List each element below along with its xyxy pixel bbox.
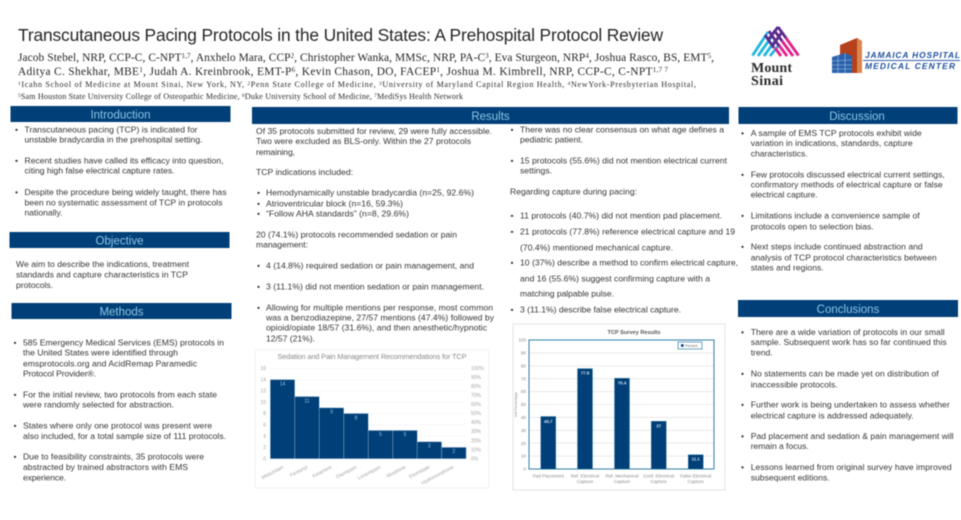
legend (678, 342, 702, 349)
text column: results right: There was no clear consensus on what age defines a (520, 125, 724, 135)
chart: sedation and pain management: 80% (471, 384, 482, 390)
authors: , Eva Sturgeon, NRP (489, 52, 585, 64)
heading: methods (12, 303, 232, 319)
chart: sedation and pain management: 20% (471, 438, 482, 444)
bullet text: introduction: Despite the procedure being widely taught, there has (24, 187, 226, 197)
text column: results left: Hemodynamically unstable bradycardia (n=25, 92.6%) (266, 188, 474, 198)
text column: results left: • (257, 199, 260, 209)
chart: sedation and pain management: 12 (260, 389, 266, 395)
bullet text: conclusions: • (741, 327, 744, 337)
bullet text: introduction: unstable bradycardia in the prehospital setting. (24, 135, 202, 145)
chart: sedation and pain management: Midazolam (261, 464, 285, 481)
bullet text: conclusions: Lessons learned from original survey have improved (751, 462, 952, 472)
text column: results left: 20 (74.1%) protocols recommended sedation or pain (256, 230, 457, 240)
text column: results right (510, 125, 738, 314)
chart: sedation and pain management: 2 (263, 445, 266, 451)
chart: sedation and pain management: 50% (471, 411, 482, 417)
chart: sedation and pain management: 70% (471, 393, 482, 399)
authors: 1 (436, 66, 440, 74)
bullet text: conclusions: trend. (751, 347, 773, 357)
chart: TCP survey results: Conf. Electrical (643, 474, 674, 478)
bullet text: methods: abstracted by trained abstractors with EMS (23, 462, 188, 472)
bullet text: conclusions: • (741, 399, 744, 409)
bullet text: methods: • (14, 420, 17, 430)
authors: , Kevin Chason, DO, FACEP (295, 66, 436, 78)
text: objective: protocols. (16, 280, 53, 290)
chart: sedation and pain management: 6 (263, 422, 266, 428)
bullet text: introduction: been no systematic assessment of TCP in protocols (24, 197, 222, 207)
affiliations: MediSys Health Network (377, 92, 464, 101)
chart: sedation and pain management: 8 (263, 411, 266, 417)
bullet text: introduction: citing high false electrical capture rates. (24, 166, 174, 176)
bullet text: introduction: Recent studies have called its efficacy into question, (24, 156, 224, 166)
bullet text: methods: 585 Emergency Medical Services (EMS) protocols in (23, 337, 224, 347)
text column: results right: Regarding capture during pacing: (510, 187, 637, 197)
text column: results left: Allowing for multiple mentions per response, most common (266, 303, 493, 313)
text column: results right: and 16 (55.6%) suggest confirming capture with a (520, 274, 710, 284)
text column: results right: • (510, 156, 514, 166)
authors: 1 (139, 66, 143, 74)
heading: introduction (10, 106, 230, 122)
chart: TCP survey results: 50 (521, 402, 526, 407)
affiliations: Duke University School of Medicine, (245, 92, 374, 101)
text column: results left: was a benzodiazepine, 27/57 mentions (47.4%) followed by (265, 313, 495, 323)
affiliations: 3 (379, 81, 382, 87)
chart: sedation and pain management: 2 (452, 449, 455, 455)
bullet text: conclusions: sample. Subsequent work has so far continued this (751, 337, 947, 347)
heading: objective (10, 232, 230, 248)
chart: TCP survey results: 20 (521, 441, 526, 446)
authors: , Anxhelo Mara, CCP (191, 52, 291, 64)
authors: , (711, 52, 714, 64)
chart: TCP survey results: Capture (688, 479, 704, 484)
text column: results right: 11 protocols (40.7%) did not mention pad placement. (520, 210, 722, 220)
bullet text: methods: also included, for a total sample size of 111 protocols. (23, 431, 226, 441)
chart: sedation and pain management: 40% (471, 420, 482, 426)
authors: 5 (708, 52, 712, 60)
chart: sedation and pain management: Hydromorphone (420, 464, 455, 487)
text column: results left: • (257, 209, 260, 219)
bullet text: discussion: characteristics. (751, 149, 808, 159)
chart: TCP survey results: 80 (521, 363, 526, 368)
authors: Jacob Stebel, NRP, CCP-C, C-NPT (18, 52, 182, 64)
chart: sedation and pain management: Diazepam (335, 464, 358, 480)
text column: results left: Of 35 protocols submitted for review, 29 were fully accessible. (256, 126, 492, 136)
text column: results left: “Follow AHA standards” (n=8, 29.6%) (266, 209, 409, 219)
chart: TCP survey results: 10 (521, 454, 526, 459)
affiliations (18, 80, 696, 101)
bullet text: introduction: • (15, 187, 18, 197)
chart: sedation and pain management: Etomidate (408, 464, 431, 480)
chart: sedation and pain management: 14 (280, 382, 285, 388)
text column: results left: • (257, 281, 260, 291)
chart: sedation and pain management: 14 (260, 377, 266, 383)
bullet text: discussion: Few protocols discussed electrical current settings, (751, 170, 945, 180)
chart: TCP survey results: Ref. Mechanical (606, 474, 638, 478)
panel: discussion (738, 107, 958, 273)
bullet text: discussion: • (741, 211, 744, 221)
text column: results right: • (510, 125, 514, 135)
text column: results left: TCP indications included: (256, 167, 353, 177)
heading: conclusions (738, 300, 958, 317)
text column: results left: 3 (11.1%) did not mention sedation or pain management. (266, 281, 484, 291)
chart: sedation and pain management: 9 (330, 410, 333, 416)
bullet text: discussion: • (741, 242, 744, 252)
authors: Aditya C. Shekhar, MBE (18, 66, 139, 78)
bullet text: methods: Protocol Provider®. (23, 368, 96, 378)
bullet text: methods: emsprotocols.org and AcidRemap Paramedic (23, 358, 198, 368)
bullet text: discussion: Limitations include a convenience sample of (751, 211, 920, 221)
chart: sedation and pain management: Ketamine (311, 464, 333, 480)
panel: results (252, 107, 738, 490)
chart: sedation and pain management: 5 (379, 432, 382, 438)
heading: discussion: Discussion (829, 111, 885, 123)
panel: introduction (10, 106, 230, 218)
text: objective: standards and capture characteristics in TCP (16, 270, 188, 280)
chart: TCP survey results (513, 324, 725, 490)
text column: results left: Two were excluded as BLS-only. Within the 27 protocols (256, 136, 471, 146)
chart: sedation and pain management: Sedation and Pain Management Recommendations for TCP (278, 352, 467, 361)
text column: results left: • (257, 188, 260, 198)
text column: results right: • (510, 304, 514, 314)
chart: TCP survey results: Capture (577, 479, 594, 484)
chart: sedation and pain management: 0% (471, 456, 479, 462)
chart: TCP survey results: Ref. Electrical (571, 474, 599, 478)
heading: results: Results (471, 111, 510, 123)
logo: Mount Sinai (751, 27, 798, 89)
heading: methods: Methods (99, 306, 144, 318)
bullet text: introduction: • (15, 125, 18, 135)
bullet text: conclusions: Further work is being undertaken to assess whether (751, 399, 950, 409)
text column: results left: 12/57 (21%). (266, 334, 315, 344)
logo: Mount Sinai: Sinai (751, 74, 783, 89)
text column: results right: pediatric patient. (520, 135, 583, 145)
chart: sedation and pain management: 8 (355, 416, 358, 422)
heading: discussion (738, 107, 958, 124)
chart: sedation and pain management: 90% (471, 375, 482, 381)
chart: sedation and pain management: Fentanyl (289, 464, 309, 479)
text column: results right: 21 protocols (77.8%) reference electrical capture and 19 (520, 226, 735, 236)
bullet text: methods: Due to feasibility constraints, 35 protocols were (23, 451, 204, 461)
bullet text: methods: were randomly selected for abstraction. (22, 399, 174, 409)
authors: 6 (292, 66, 296, 74)
authors (18, 52, 714, 78)
chart: TCP survey results: False Electrical (680, 474, 711, 478)
chart: TCP survey results: 60 (521, 389, 526, 394)
heading: introduction: Introduction (90, 110, 151, 122)
chart: sedation and pain management: 4 (263, 434, 266, 440)
chart: TCP survey results: Pad Placement (533, 474, 565, 478)
bullet text: conclusions: remain a focus. (751, 441, 809, 451)
bullet text: conclusions: There are a wide variation of protocols in our small (751, 327, 945, 337)
text column: results left: Atrioventricular block (n=16, 59.3%) (266, 199, 403, 209)
bullet text: discussion: • (741, 170, 744, 180)
bullet text: conclusions (741, 327, 954, 482)
chart: sedation and pain management (255, 350, 489, 488)
bullet text: methods: experience. (23, 472, 66, 482)
chart: TCP survey results: 100 (518, 338, 526, 343)
bullet text: discussion: • (741, 128, 744, 138)
logo: Jamaica Hospital Medical Center: MEDICAL CENTER (865, 61, 955, 71)
authors: , Joshua M. Kimbrell, NRP, CCP-C, C-NPT (440, 66, 653, 78)
text column: results left: • (257, 303, 260, 313)
affiliations: Penn State College of Medicine, (251, 80, 378, 89)
text column: results left: remaining, (256, 147, 295, 157)
bullet text: introduction: Transcutaneous pacing (TCP) is indicated for (24, 125, 198, 135)
affiliations: 5 (18, 93, 21, 99)
chart: TCP survey results: 11.1 (692, 456, 700, 462)
text column: results right: 15 protocols (55.6%) did not mention electrical current (520, 156, 728, 166)
text column: results left: opioid/opiate 18/57 (31.6%), and then anesthetic/hypnotic (266, 323, 488, 333)
affiliations: NewYork-Presbyterian Hospital, (571, 80, 696, 89)
panel: objective (10, 232, 230, 290)
chart: sedation and pain management: 10 (260, 400, 266, 406)
chart: TCP survey results: 37 (656, 424, 662, 428)
authors: 3 (485, 52, 489, 60)
chart: TCP survey results: 40 (521, 415, 526, 420)
text column: results left: management: (256, 240, 308, 250)
affiliations: 4 (568, 81, 571, 87)
bullet text: methods: • (14, 337, 17, 347)
text column: results right: • (510, 258, 514, 268)
chart: sedation and pain management: 11 (304, 398, 310, 404)
heading: results (252, 107, 729, 124)
chart: sedation and pain management: 3 (428, 444, 431, 450)
chart: sedation and pain management: Lorazepam (357, 464, 382, 482)
bullet text: methods: • (14, 389, 17, 399)
bullet text: discussion: states and regions. (751, 263, 824, 273)
authors: 1,7 7 (653, 66, 668, 74)
bullet text: introduction (15, 125, 226, 218)
text column: results right: 10 (37%) describe a method to confirm electrical capture, (520, 258, 738, 268)
bullet text: discussion: analysis of TCP protocol characteristics between (751, 253, 937, 263)
chart: TCP survey results: TCP Survey Results (607, 330, 661, 336)
panel: methods (12, 303, 232, 482)
affiliations: 1 (18, 81, 21, 87)
text column: results left: • (257, 260, 260, 270)
bullet text: discussion: protocols open to selection bias. (751, 222, 874, 232)
chart: TCP survey results: 0 (523, 467, 526, 472)
text column: results right: settings. (520, 166, 552, 176)
text column: results left: 4 (14.8%) required sedation or pain management, and (266, 260, 474, 270)
bullet text: discussion: confirmatory methods of electrical capture or false (751, 180, 943, 190)
bullet text: discussion: A sample of EMS TCP protocols exhibit wide (751, 128, 922, 138)
bullet text: methods: For the initial review, two protocols from each state (23, 389, 217, 399)
authors: 1,7 (182, 52, 191, 60)
chart: TCP survey results: 30 (521, 428, 526, 433)
bullet text: methods: States where only one protocol was present were (23, 420, 212, 430)
bullet text: methods: the United States were identified through (23, 347, 178, 357)
chart: TCP survey results: Net Percentage (514, 392, 518, 417)
affiliations: 7 (374, 93, 377, 99)
logo: Jamaica Hospital Medical Center (832, 38, 960, 73)
chart: sedation and pain management: 16 (260, 366, 266, 372)
bullet text: discussion: Next steps include continued abstraction and (751, 242, 923, 252)
bullet text: conclusions: electrical capture is addressed adequately. (751, 410, 914, 420)
title: Transcutaneous Pacing Protocols in the United States: A Prehospital Protocol Review (18, 25, 663, 45)
chart: TCP survey results: Capture (614, 479, 631, 484)
text column: results left (256, 126, 495, 344)
authors: 4 (585, 52, 589, 60)
text: objective: We aim to describe the indications, treatment (16, 259, 190, 269)
text column: results right: • (510, 226, 514, 236)
chart: TCP survey results: 70.4 (618, 380, 627, 386)
authors: 2 (291, 52, 295, 60)
text column: results right: matching palpable pulse. (520, 289, 614, 299)
chart: sedation and pain management: 0 (263, 456, 266, 462)
chart: TCP survey results: 40.7 (544, 419, 553, 424)
affiliations: 6 (242, 93, 245, 99)
text column: results right: • (510, 210, 514, 220)
chart: sedation and pain management: 5 (404, 432, 407, 438)
bullet text: discussion (741, 128, 945, 273)
authors: , Judah A. Kreinbrook, EMT-P (143, 66, 291, 78)
chart: TCP survey results: 90 (521, 350, 526, 356)
chart: sedation and pain management: 60% (471, 402, 482, 408)
chart: TCP survey results: Capture (651, 479, 667, 484)
affiliations: University of Maryland Capital Region Health, (382, 80, 567, 89)
bullet text: methods: • (14, 451, 17, 461)
bullet text: conclusions: • (741, 462, 744, 472)
bullet text: discussion: variation in indications, standards, capture (751, 138, 913, 148)
bullet text: conclusions: No statements can be made yet on distribution of (751, 368, 939, 378)
affiliations: Sam Houston State University College of Osteopathic Medicine, (21, 92, 242, 101)
chart: sedation and pain management: Morphine (386, 464, 407, 480)
chart: TCP survey results: 70 (521, 376, 526, 381)
bullet text: conclusions: Pad placement and sedation & pain management will (751, 431, 954, 441)
affiliations: Icahn School of Medicine at Mount Sinai, New York, NY, (21, 80, 247, 89)
authors: , Christopher Wanka, MMSc, NRP, PA-C (294, 52, 485, 64)
logo: Mount Sinai: Mount (751, 61, 792, 76)
heading: conclusions: Conclusions (817, 304, 880, 316)
bullet text: introduction: • (15, 156, 18, 166)
bullet text: conclusions: subsequent editions. (751, 472, 830, 482)
bullet text: discussion: electrical capture. (751, 190, 818, 200)
text column: results right: 3 (11.1%) describe false electrical capture. (520, 304, 681, 314)
text: objective (16, 259, 190, 290)
chart: sedation and pain management: 10% (471, 447, 482, 453)
text column: results right: (70.4%) mentioned mechanical capture. (520, 242, 673, 252)
legend: Percent (685, 344, 697, 348)
heading: objective: Objective (96, 236, 143, 248)
bullet text: introduction: nationally. (24, 208, 62, 218)
logo: Jamaica Hospital Medical Center: JAMAICA HOSPITAL (865, 50, 960, 60)
chart: TCP survey results: 77.8 (581, 370, 590, 376)
authors: , Joshua Rasco, BS, EMT (589, 52, 708, 64)
chart: sedation and pain management: 30% (471, 429, 482, 435)
bullet text: conclusions: • (741, 431, 744, 441)
bullet text: conclusions: • (741, 368, 744, 378)
panel: conclusions (738, 300, 958, 482)
chart: sedation and pain management: 100% (471, 366, 484, 372)
bullet text: methods (14, 337, 226, 482)
bullet text: conclusions: inaccessible protocols. (751, 379, 838, 389)
affiliations: 2 (247, 81, 250, 87)
